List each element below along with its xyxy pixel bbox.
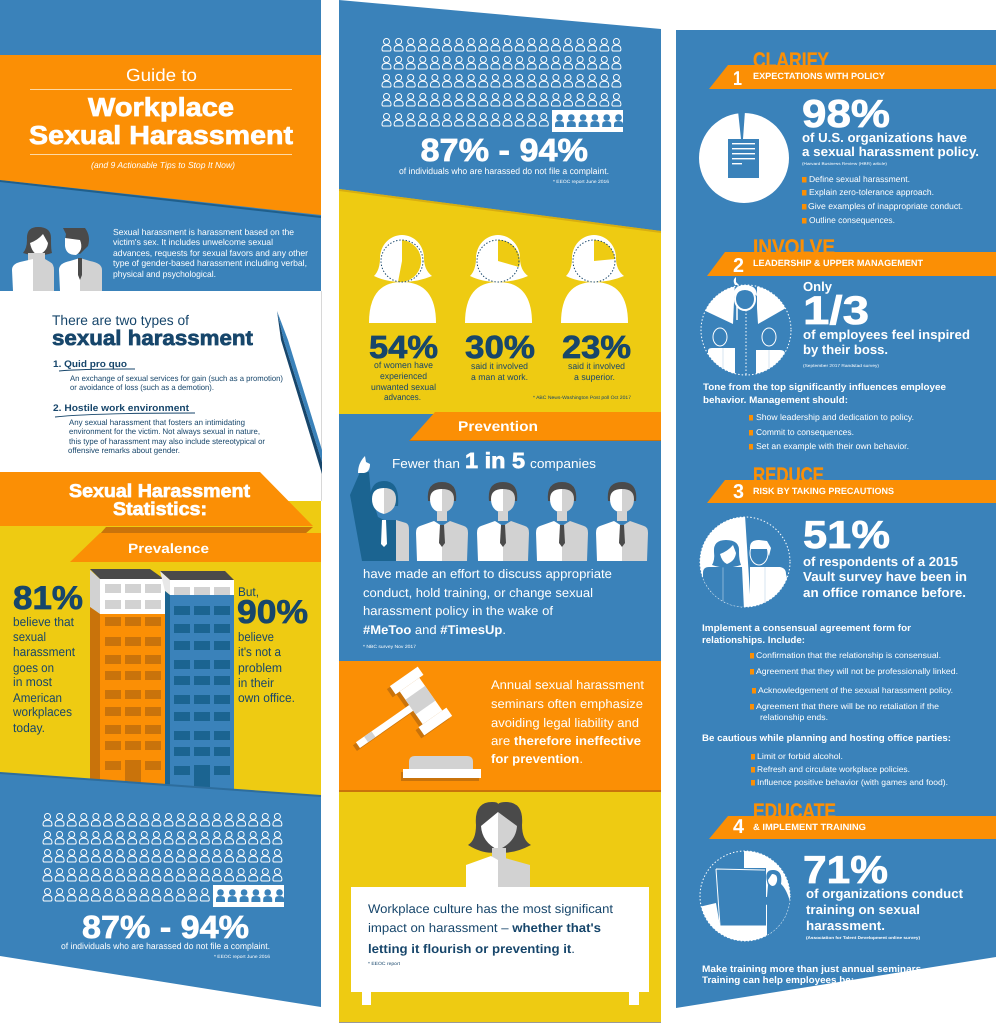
- stat: only 1/3: by their boss.: [803, 342, 888, 357]
- headline: fewer than 1 in 5 companies: Fewer than: [392, 456, 460, 471]
- icon: pie with document: [699, 111, 789, 203]
- banner: EXPECTATIONS WITH POLICY: [753, 71, 885, 81]
- banner: 2: [733, 255, 744, 277]
- stat: 30%: 30%: [465, 329, 535, 365]
- stat: only 1/3: 1/3: [803, 289, 869, 333]
- type 1 quid pro quo: An exchange of sexual services for gain (such as a promotion): [70, 374, 283, 383]
- parties heading: Be cautious while planning and hosting office parties:: [702, 733, 951, 744]
- banner: statistics: Sexual Harassment: [69, 480, 250, 501]
- banner: 1: [733, 68, 742, 90]
- icon: woman and man: [12, 227, 102, 291]
- seminars text: seminars often emphasize: [491, 697, 643, 711]
- heading word: CLARIFY: [753, 49, 829, 72]
- icon: woman: [466, 802, 531, 888]
- stat description: (Association for Talent Development online survey): [806, 935, 921, 940]
- banner: prevention: Prevention: [458, 418, 538, 434]
- stat: 81%: in most: [13, 675, 53, 689]
- heading: two types: [52, 312, 253, 350]
- source: * EEOC report June 2016: [214, 954, 270, 959]
- stat: 81%: [12, 579, 83, 735]
- stat: 23%: 23%: [562, 329, 631, 365]
- source: * ABC News-Washington Post poll Oct 2017: [533, 395, 631, 401]
- stat: 23%: said it involved: [568, 361, 625, 371]
- bullet list: Show leadership and dedication to policy.: [756, 412, 914, 422]
- intro text: [113, 227, 308, 279]
- agreement text: [702, 623, 911, 646]
- icon: raised-hand man: [350, 456, 409, 561]
- seminars text: avoiding legal liability and: [491, 716, 639, 730]
- banner: [709, 816, 996, 839]
- tone text: Tone from the top significantly influences employee: [703, 382, 946, 393]
- bullet list: Give examples of inappropriate conduct.: [808, 201, 963, 211]
- bullet list: [751, 752, 948, 787]
- stat: 98%: 98%: [802, 93, 890, 136]
- title banner: [0, 55, 321, 215]
- icon: orange building: [90, 569, 165, 785]
- prevention text: conduct, hold training, or change sexual: [363, 586, 593, 600]
- intro text: victim's sex. It includes unwelcome sexual: [113, 237, 273, 247]
- headline: fewer than 1 in 5 companies: [392, 448, 597, 473]
- title shadow: [0, 180, 321, 218]
- card: workplace culture: * EEOC report: [368, 961, 401, 966]
- tone text: [703, 382, 946, 406]
- icon: woman pie 54%: [369, 235, 436, 323]
- agreement text: Implement a consensual agreement form for: [702, 623, 911, 634]
- stat: 87% - 94%: 87% - 94%: [82, 909, 249, 945]
- icon: man 4: [536, 482, 588, 561]
- icon: woman pie 23%: [561, 235, 628, 323]
- section 1: clarify: [699, 49, 996, 225]
- stat: 54%: unwanted sexual: [371, 382, 436, 392]
- icon: office romance circle: [700, 516, 790, 608]
- yellow panel: [339, 189, 661, 416]
- stat: 87% - 94%: 87% - 94%: [420, 132, 588, 168]
- banner: 4: [733, 816, 745, 838]
- people grid: [43, 814, 284, 907]
- intro text: physical and psychological.: [113, 269, 216, 279]
- type 2 hostile work environment: offensive remarks about gender.: [68, 446, 180, 455]
- banner: RISK BY TAKING PRECAUTIONS: [753, 486, 894, 496]
- type 2 hostile work environment: environment for the victim. Not always sexual in nature,: [69, 427, 260, 436]
- heading word: EDUCATE: [753, 800, 836, 823]
- stat: 30%: said it involved: [471, 361, 528, 371]
- main title: [29, 92, 293, 150]
- orange seminars panel: [338, 661, 661, 792]
- stat: 81%: American: [13, 691, 62, 705]
- card: workplace culture: [351, 887, 649, 1005]
- stat: 90%: believe: [238, 630, 274, 644]
- stat description: an office romance before.: [803, 585, 966, 600]
- main title: Sexual Harassment: [29, 120, 293, 150]
- stat description: [803, 554, 967, 600]
- stat: 90%: [237, 585, 308, 705]
- stat: 90%: 90%: [237, 593, 308, 630]
- stat: 71%: 71%: [803, 849, 888, 892]
- banner: LEADERSHIP & UPPER MANAGEMENT: [753, 258, 923, 268]
- icon: leader circle: [700, 277, 792, 376]
- stat description: of respondents of a 2015: [803, 554, 958, 569]
- bullet list: relationship ends.: [760, 713, 828, 722]
- stat: 54%: advances.: [384, 392, 421, 402]
- stat: only 1/3: of employees feel inspired: [803, 327, 970, 342]
- bullet list: Commit to consequences.: [756, 427, 854, 437]
- bullet list: Agreement that there will be no retaliation if the: [756, 702, 939, 711]
- headline: fewer than 1 in 5 companies: companies: [530, 456, 597, 471]
- type 2 hostile work environment: Any sexual harassment that fosters an intimidating: [69, 418, 245, 427]
- intro text: Sexual harassment is harassment based on the: [113, 227, 294, 237]
- people grid: [382, 38, 623, 132]
- stat: 54%: 54%: [369, 329, 438, 365]
- stat description: of U.S. organizations have: [802, 130, 967, 145]
- blue prevention panel: [339, 412, 661, 662]
- panel: column three: [676, 30, 996, 1024]
- bullet list: Define sexual harassment.: [809, 174, 910, 184]
- seminars text: for prevention .: [491, 752, 583, 766]
- bullet list: Refresh and circulate workplace policies.: [757, 765, 910, 774]
- bullet list: [750, 651, 958, 722]
- intro text: advances, requests for sexual favors and any other: [113, 248, 308, 258]
- stat: 90%: it's not a: [238, 645, 281, 659]
- stat: 23%: [562, 329, 631, 382]
- seminars text: [491, 678, 645, 766]
- stat description: training on sexual: [806, 902, 920, 917]
- bullet list: Limit or forbid alcohol.: [757, 752, 843, 761]
- stat: 51%: 51%: [803, 514, 890, 557]
- type 1 quid pro quo: 1. Quid pro quo: [53, 359, 127, 370]
- stat: 81%: harassment: [13, 645, 75, 659]
- card: workplace culture: Workplace culture has the most significant: [368, 902, 614, 916]
- banner: [707, 480, 996, 503]
- stat: 54%: of women have: [374, 360, 433, 370]
- stat: 90%: own office.: [238, 691, 295, 705]
- blue complaint panel: [0, 772, 321, 1007]
- card: workplace culture: impact on harassment – whether that's: [368, 921, 601, 935]
- bullet list: Acknowledgement of the sexual harassment policy.: [758, 686, 953, 695]
- stat: 81%: 81%: [13, 579, 83, 616]
- intro text: type of gender-based harassment including verbal,: [113, 258, 307, 268]
- blue background: [676, 30, 996, 1024]
- heading: two types: sexual harassment: [52, 327, 253, 350]
- caption: of individuals who are harassed do not file a complaint.: [399, 166, 609, 176]
- prevention text: harassment policy in the wake of: [363, 604, 554, 618]
- stat: 81%: workplaces: [12, 705, 72, 719]
- stat: 54%: experienced: [380, 371, 427, 381]
- type 2 hostile work environment: 2. Hostile work environment: [53, 403, 190, 414]
- type 1 quid pro quo: or avoidance of loss (such as a demotion).: [70, 383, 214, 392]
- type 2 hostile work environment: [53, 403, 265, 455]
- headline: fewer than 1 in 5 companies: 1 in 5: [465, 448, 525, 473]
- stat: 54%: [369, 329, 438, 402]
- section 4: educate: [695, 800, 996, 986]
- banner: prevalence: Prevalence: [128, 541, 210, 556]
- icon: blue building: [160, 571, 234, 790]
- agreement text: relationships. Include:: [702, 635, 805, 646]
- prevention text: #MeToo and #TimesUp.: [363, 623, 506, 637]
- yellow culture panel: [339, 792, 661, 1023]
- seminars text: are therefore ineffective: [491, 734, 641, 748]
- stat: 90%: in their: [238, 676, 274, 690]
- stat: only 1/3: Only: [803, 279, 833, 294]
- yellow statistics panel: [0, 501, 321, 796]
- stat description: (Harvard Business Review (HBR) article): [802, 161, 888, 166]
- stat: 90%: problem: [238, 661, 282, 675]
- blue top panel: [339, 0, 661, 232]
- banner: statistics: Statistics:: [113, 498, 207, 519]
- type 1 quid pro quo: [53, 359, 283, 392]
- stat: only 1/3: [803, 279, 970, 368]
- seminars text: Annual sexual harassment: [491, 678, 645, 692]
- stat description: [802, 130, 979, 166]
- stat: 81%: believe that: [13, 615, 74, 629]
- icon: man 3: [477, 482, 529, 561]
- bullet list: Confirmation that the relationship is consensual.: [756, 651, 941, 660]
- card: workplace culture: letting it flourish or preventing it .: [368, 942, 575, 956]
- training text: [702, 964, 924, 986]
- panel border: [321, 291, 322, 501]
- caption: of individuals who are harassed do not file a complaint.: [61, 941, 270, 951]
- main title: Workplace: [88, 92, 234, 122]
- prevention text: have made an effort to discuss appropriate: [363, 567, 612, 581]
- stat: 81%: goes on: [13, 661, 54, 675]
- panel: column two: [338, 0, 661, 1023]
- stat description: a sexual harassment policy.: [802, 144, 979, 159]
- bullet list: Influence positive behavior (with games and food).: [757, 778, 948, 787]
- heading word: INVOLVE: [753, 236, 835, 259]
- bullet list: Outline consequences.: [809, 215, 895, 225]
- stat: 81%: today.: [13, 721, 45, 735]
- banner: & IMPLEMENT TRAINING: [753, 822, 866, 832]
- stat: 30%: [465, 329, 535, 382]
- heading: two types: There are two types of: [52, 312, 189, 328]
- type 2 hostile work environment: this type of harassment may also include stereotypical or: [69, 437, 265, 446]
- icon: gavel: [338, 667, 481, 781]
- training text: Training can help employees be:: [702, 975, 854, 986]
- banner: [709, 65, 996, 90]
- stat: 23%: a superior.: [574, 372, 615, 382]
- section 2: involve: [695, 236, 996, 451]
- stat description: [806, 886, 964, 940]
- prevention text: [363, 567, 612, 637]
- stat: 81%: sexual: [13, 630, 46, 644]
- banner: 3: [733, 481, 744, 503]
- source: * NBC survey Nov 2017: [363, 644, 416, 649]
- stat description: of organizations conduct: [806, 886, 964, 901]
- training text: Make training more than just annual seminars.: [702, 964, 924, 975]
- icon: pencil: [277, 311, 322, 474]
- icon: man 5: [596, 482, 648, 561]
- bullet list: Set an example with their own behavior.: [756, 441, 909, 451]
- icon: woman pie 30%: [465, 235, 532, 323]
- stat: 30%: a man at work.: [471, 372, 528, 382]
- banner: statistics: [0, 472, 313, 534]
- bullet list: Explain zero-tolerance approach.: [809, 187, 934, 197]
- stat: 90%: But,: [238, 585, 259, 599]
- banner: [707, 252, 996, 277]
- subtitle: (and 9 Actionable Tips to Stop It Now): [91, 160, 235, 170]
- banner: prevalence: [70, 533, 321, 562]
- icon: training circle: [700, 850, 790, 942]
- bullet list: [802, 174, 963, 225]
- bullet list: [749, 412, 914, 451]
- panel: column one: [0, 0, 322, 1007]
- heading word: REDUCE: [753, 464, 824, 487]
- source: * EEOC report June 2016: [553, 179, 609, 184]
- title: guide to: Guide to: [126, 65, 197, 85]
- background: top blue band: [0, 0, 321, 60]
- section 3: reduce: [695, 464, 996, 787]
- stat description: Vault survey have been in: [803, 569, 967, 584]
- stat: only 1/3: (September 2017 Randstad survey): [803, 363, 880, 368]
- tone text: behavior. Management should:: [703, 395, 848, 406]
- bullet list: Agreement that they will not be professionally linked.: [756, 667, 958, 676]
- icon: man 2: [416, 482, 468, 561]
- intro blue panel: [0, 175, 321, 291]
- banner: prevention: [409, 412, 661, 441]
- bottom cut-off edge: [676, 957, 996, 1024]
- stat description: harassment.: [806, 918, 885, 933]
